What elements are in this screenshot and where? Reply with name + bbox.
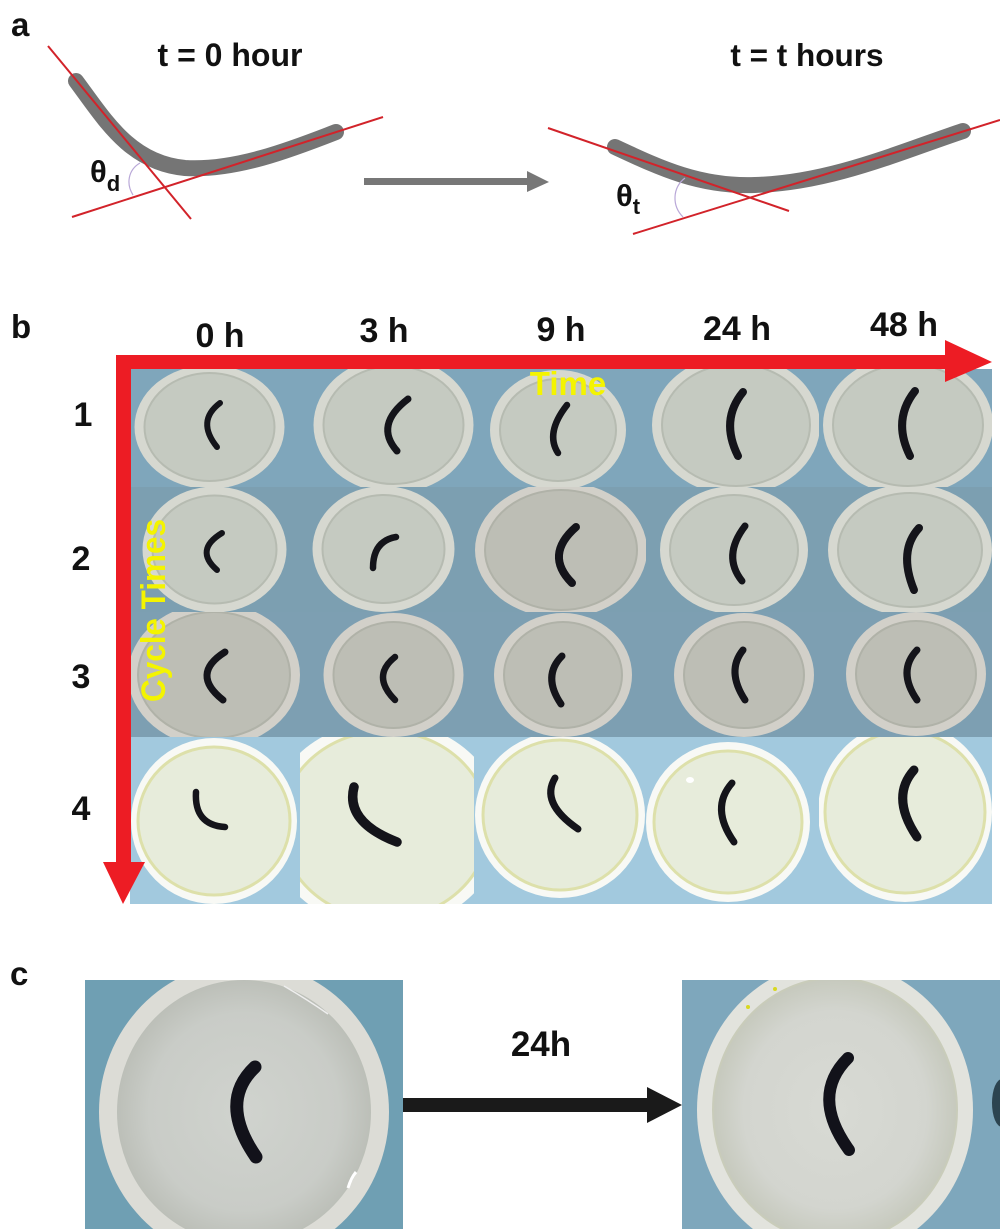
arrow label 24h: 24h — [511, 1025, 571, 1064]
cell r3 c4 — [646, 612, 819, 737]
row labels — [72, 396, 92, 828]
column headers — [195, 306, 938, 355]
cell r4 c2 — [300, 737, 474, 904]
cell r4 c4 — [646, 737, 819, 904]
cell r4 c5 — [819, 737, 992, 904]
row labels: 1 — [74, 396, 92, 434]
theta d label: θ — [90, 154, 107, 189]
column headers: 3 h — [359, 312, 409, 350]
column headers: 0 h — [195, 317, 245, 355]
cell r2 c4 — [646, 487, 819, 612]
row labels: 3 — [72, 658, 90, 696]
angle arc at t=0 — [129, 163, 140, 195]
cell r1 c2 — [300, 369, 474, 487]
cell r4 c3 — [474, 737, 646, 904]
arrow: grey process arrow — [364, 171, 549, 192]
cell r3 c1 — [131, 612, 300, 737]
black 24h arrow — [403, 1087, 682, 1123]
panel a: initial state diagram — [48, 37, 383, 219]
red tangent lines at t=t — [548, 120, 1000, 234]
panel label b: b — [11, 308, 31, 345]
cell r2 c3 — [474, 487, 646, 612]
column headers: 24 h — [703, 310, 771, 348]
axis label: Cycle Times: Cycle Times — [135, 519, 173, 702]
theta d label: d — [107, 171, 120, 196]
cell r2 c2 — [300, 487, 474, 612]
cell r1 c3 — [474, 369, 646, 487]
cell r3 c2 — [300, 612, 474, 737]
red tangent lines at t=0 — [48, 46, 383, 219]
theta t label: t — [633, 194, 641, 219]
cell r1 c4 — [646, 369, 819, 487]
panel label a: a — [11, 6, 30, 43]
angle arc at t=t — [675, 178, 685, 217]
row labels: 4 — [72, 790, 91, 828]
cell r4 c1 — [130, 737, 300, 904]
axis label: Time: Time — [530, 365, 606, 402]
panel a: final state diagram — [548, 37, 1000, 234]
heading: t = 0 hour: t = 0 hour — [158, 37, 302, 73]
photo grid — [128, 355, 993, 929]
theta t label: θ — [616, 178, 633, 213]
grey bent strip at t=t — [615, 131, 963, 185]
cell r2 c1 — [131, 487, 300, 612]
grey bent strip at t=0 — [76, 81, 336, 168]
cell r1 c1 — [131, 369, 300, 487]
row labels: 2 — [72, 540, 90, 578]
photo: after 24 h — [682, 980, 1000, 1229]
heading: t = t hours: t = t hours — [730, 37, 884, 73]
panel label c: c — [10, 955, 28, 992]
cell r3 c5 — [819, 612, 992, 737]
photo: before recovery — [85, 980, 403, 1229]
red cycle axis arrow — [103, 355, 145, 904]
cell r3 c3 — [474, 612, 646, 737]
column headers: 48 h — [870, 306, 938, 344]
column headers: 9 h — [536, 311, 586, 349]
red time axis arrow — [116, 340, 992, 382]
cell r2 c5 — [819, 487, 992, 612]
cell r1 c5 — [819, 369, 992, 487]
